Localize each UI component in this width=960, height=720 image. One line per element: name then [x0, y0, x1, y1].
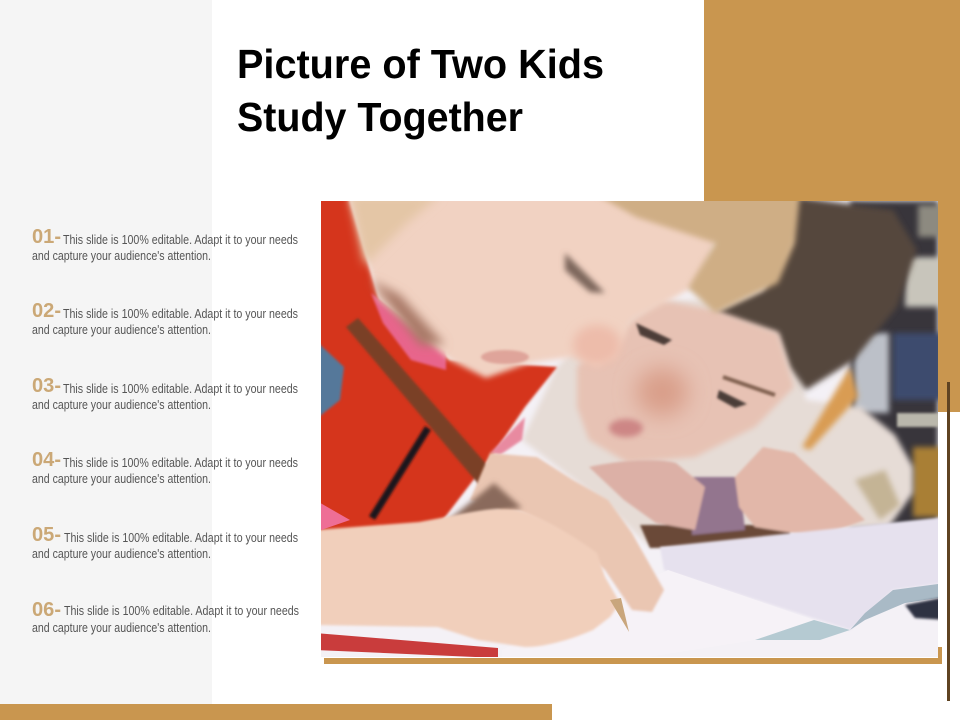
- title: [237, 41, 604, 140]
- panel: top right tan block: [704, 0, 960, 412]
- list item 04: [32, 449, 298, 486]
- first child: face: [348, 195, 725, 378]
- first child: pink collar: [371, 293, 446, 370]
- list item 01: 01-: [32, 226, 61, 248]
- list item 04: and capture your audience's attention.: [32, 471, 211, 486]
- list item 01: This slide is 100% editable. Adapt it to your needs: [63, 232, 298, 247]
- panel: left grey background: [0, 0, 212, 704]
- photo background: blurred shelves: [321, 201, 945, 657]
- first child: far hand: [470, 453, 664, 612]
- paper and open book: [658, 516, 938, 640]
- right vertical dark line: [947, 382, 950, 701]
- list item 06: 06-: [32, 599, 61, 621]
- pencil tip: [610, 598, 629, 632]
- photo: two kids studying (illustration): [315, 195, 945, 658]
- list item 01: [32, 226, 298, 263]
- list item 02: [32, 300, 298, 337]
- second child: face: [577, 300, 794, 463]
- list item 03: This slide is 100% editable. Adapt it to your needs: [63, 381, 298, 396]
- title: Picture of Two Kids: [237, 41, 604, 87]
- first child: writing hand and arm: [315, 509, 620, 647]
- list item 04: 04-: [32, 449, 61, 471]
- list item 02: This slide is 100% editable. Adapt it to your needs: [63, 306, 298, 321]
- list item 05: [32, 524, 298, 561]
- first child: red jacket: [315, 195, 557, 535]
- title: Study Together: [237, 94, 523, 140]
- list item 04: This slide is 100% editable. Adapt it to your needs: [63, 455, 298, 470]
- list item 06: This slide is 100% editable. Adapt it to your needs: [64, 603, 299, 618]
- second child: sweater: [522, 300, 913, 545]
- second child: dark hair: [715, 195, 917, 390]
- second child: hands and toy: [589, 447, 865, 548]
- red pencil on desk: [315, 633, 498, 658]
- list item 01: and capture your audience's attention.: [32, 248, 211, 263]
- list item 02: 02-: [32, 300, 61, 322]
- pencil held by first child: [346, 318, 525, 512]
- list item 05: and capture your audience's attention.: [32, 546, 211, 561]
- bottom tan bar: [0, 704, 552, 720]
- photo frame: tan L-shaped corner: [324, 647, 942, 664]
- list item 05: 05-: [32, 524, 61, 546]
- list item 05: This slide is 100% editable. Adapt it to your needs: [64, 530, 298, 545]
- list item 06: [32, 599, 299, 635]
- list item 03: [32, 375, 298, 412]
- list item 02: and capture your audience's attention.: [32, 322, 211, 337]
- list item 03: and capture your audience's attention.: [32, 397, 211, 412]
- list item 03: 03-: [32, 375, 61, 397]
- text list: six numbered items: [32, 226, 299, 635]
- list item 06: and capture your audience's attention.: [32, 620, 211, 635]
- first child: blond hair: [597, 195, 800, 313]
